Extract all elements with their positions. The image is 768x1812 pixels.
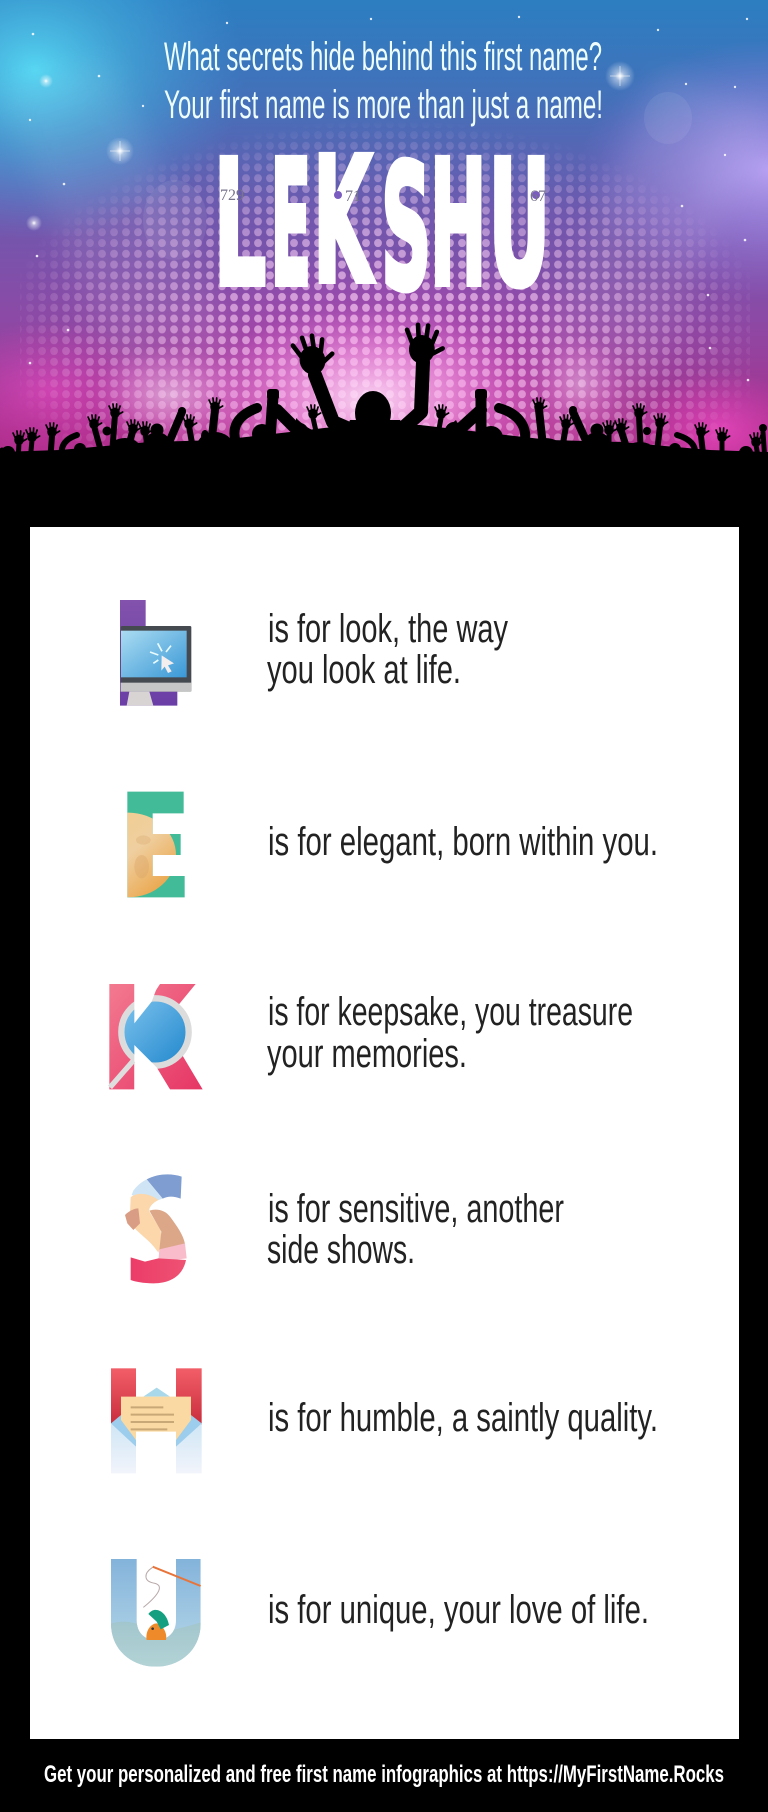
icon: letter E with moon (127, 792, 185, 898)
icon: letter U with fishing scene (110, 1557, 203, 1670)
white content panel (30, 527, 739, 1739)
text: K meaning (267, 990, 633, 1076)
name title: LEKSHU: K (313, 120, 375, 322)
text: S meaning: is for sensitive, another (268, 1187, 564, 1231)
text: L meaning: you look at life. (267, 648, 461, 692)
text: L meaning: is for look, the way (268, 607, 508, 651)
name title: LEKSHU (213, 120, 550, 330)
name title: LEKSHU: U (488, 123, 550, 325)
text: K meaning: your memories. (267, 1032, 467, 1076)
text: L meaning (267, 607, 508, 692)
name title: LEKSHU: S (381, 129, 431, 330)
intro heading (164, 35, 603, 127)
icon: letter H with envelope (111, 1368, 202, 1473)
name title: LEKSHU: H (430, 123, 486, 325)
name title: LEKSHU: 67 (530, 188, 546, 205)
name title: LEKSHU: 729 (220, 187, 244, 204)
crowd silhouette (0, 324, 768, 530)
name title: LEKSHU: E (270, 124, 311, 325)
icon: letter K with magnifier (109, 984, 203, 1089)
name title: LEKSHU: 71 (345, 188, 361, 205)
header concert background (0, 0, 768, 452)
icon: letter S with handshake (125, 1174, 187, 1283)
text: K meaning: is for keepsake, you treasure (268, 990, 633, 1034)
text: S meaning (267, 1187, 564, 1272)
text: S meaning: side shows. (267, 1228, 415, 1272)
sparkles (26, 16, 749, 381)
icon: letter L with computer monitor (120, 600, 191, 706)
name title: LEKSHU: L (213, 125, 266, 326)
